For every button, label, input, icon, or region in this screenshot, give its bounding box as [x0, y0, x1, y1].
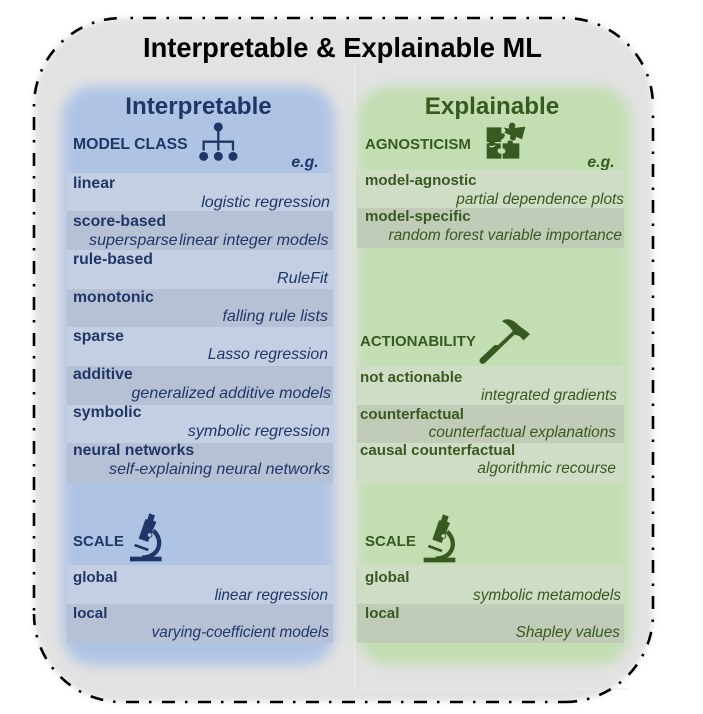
row: global: [357, 565, 624, 604]
row: global: global: [73, 569, 117, 586]
row: not actionable: not actionable: [360, 369, 462, 386]
row: monotonic: monotonic: [73, 289, 154, 306]
row: not actionable: integrated gradients: [481, 387, 617, 404]
row: counterfactual: counterfactual: [360, 406, 464, 423]
row: score-based: [67, 211, 333, 250]
row: global: [67, 565, 333, 604]
row: causal counterfactual: algorithmic recourse: [477, 460, 616, 477]
label: e.g.: e.g.: [291, 154, 319, 171]
row: local: local: [73, 605, 107, 622]
row: additive: generalized additive models: [131, 384, 331, 402]
row: neural networks: neural networks: [73, 442, 194, 459]
row: local: [67, 604, 333, 643]
row: model-specific: random forest variable importance: [388, 227, 622, 244]
row: linear: logistic regression: [201, 193, 330, 211]
row: global: linear regression: [215, 587, 328, 604]
row: neural networks: [67, 442, 333, 483]
icon: hammer: [483, 319, 530, 361]
row: score-based: score-based: [73, 213, 166, 230]
icon: puzzle: [487, 123, 525, 159]
title: Interpretable & Explainable ML: [143, 32, 542, 63]
row: global: global: [365, 569, 409, 586]
row: monotonic: falling rule lists: [222, 307, 328, 325]
row: local: local: [365, 605, 399, 622]
heading: explainable: Explainable: [425, 93, 559, 120]
icon: hierarchy: [199, 122, 237, 161]
row: local: Shapley values: [516, 624, 620, 641]
panel: interpretable: [62, 86, 335, 665]
row: sparse: Lasso regression: [208, 346, 328, 363]
row: rule-based: [67, 250, 333, 289]
row: sparse: sparse: [73, 328, 124, 345]
row: neural networks: self-explaining neural networks: [109, 460, 330, 478]
row: local: [357, 604, 624, 643]
row: causal counterfactual: causal counterfactual: [360, 442, 515, 459]
heading: interpretable: Interpretable: [125, 93, 272, 120]
row: rule-based: rule-based: [73, 251, 153, 268]
section label: scale: SCALE: [365, 533, 416, 550]
row: symbolic: symbolic regression: [188, 422, 330, 440]
row: model-agnostic: partial dependence plots: [455, 191, 624, 208]
row: not actionable: [357, 366, 624, 405]
panel background: interpretable: [62, 86, 335, 665]
row: additive: additive: [73, 366, 133, 383]
row: counterfactual: counterfactual explanations: [429, 424, 616, 441]
row: counterfactual: [357, 405, 624, 443]
icon: microscope: [424, 514, 455, 562]
row: symbolic: symbolic: [73, 404, 142, 421]
section label: scale: SCALE: [73, 533, 124, 550]
icon: microscope: [130, 513, 162, 561]
row: local: varying-coefficient models: [152, 624, 329, 641]
row: causal counterfactual: [357, 442, 624, 483]
section label: actionability: ACTIONABILITY: [360, 333, 476, 350]
panel background: explainable: [357, 86, 630, 665]
row: model-agnostic: [357, 170, 624, 208]
row: model-specific: [357, 208, 624, 248]
label: e.g.: e.g.: [587, 154, 615, 171]
row: global: symbolic metamodels: [473, 587, 621, 604]
row: additive: [67, 366, 333, 405]
section label: agnosticism: AGNOSTICISM: [365, 136, 471, 153]
row: linear: [67, 173, 333, 211]
row: score-based: supersparse linear integer models: [89, 231, 328, 249]
section label: model class: MODEL CLASS: [73, 136, 188, 153]
panel: explainable: [357, 86, 630, 665]
row: model-agnostic: model-agnostic: [365, 172, 477, 189]
row: symbolic: [67, 404, 333, 443]
row: monotonic: [67, 289, 333, 327]
row: linear: linear: [73, 175, 115, 192]
row: rule-based: RuleFit: [277, 269, 330, 287]
row: sparse: [67, 327, 333, 366]
row: model-specific: model-specific: [365, 208, 471, 225]
